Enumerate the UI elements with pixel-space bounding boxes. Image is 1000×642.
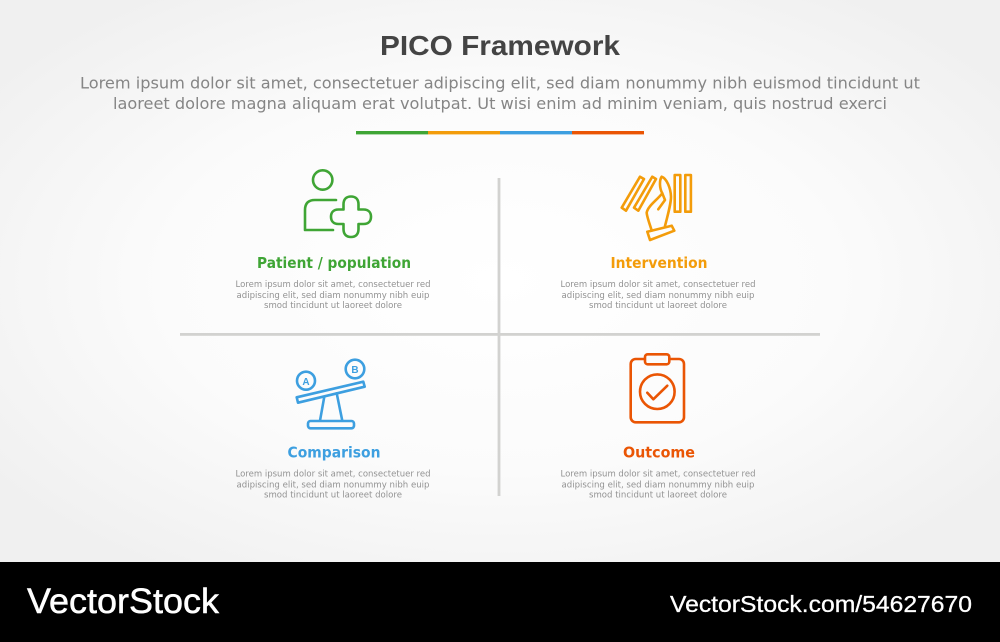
footer band [0,562,1000,642]
subtitle text: Lorem ipsum dolor sit amet, consectetuer adipiscing elit, sed diam nonummy nibh euismod tincidunt ut [80,74,920,92]
text block: outcome [560,470,756,500]
text block: patient [236,280,430,311]
text block: comparison: Lorem ipsum dolor sit amet, consectetuer red [236,470,430,480]
text block: intervention: Lorem ipsum dolor sit amet, consectetuer red [560,280,756,290]
icon: hand stopping dominoes [622,175,691,240]
text block: comparison: smod tincidunt ut laoreet dolore [264,490,402,500]
title: PICO Framework [380,30,620,61]
text block: patient: adipiscing elit, sed diam nonummy nibh euip [236,291,430,301]
subtitle text [80,74,920,113]
icon: seesaw comparing A and B: A [302,377,310,388]
panel: comparison [236,360,430,500]
text block: intervention: adipiscing elit, sed diam nonummy nibh euip [562,291,754,301]
watermark url text: VectorStock.com/54627670 [670,591,972,617]
text block: comparison: adipiscing elit, sed diam nonummy nibh euip [236,480,430,490]
heading: patient / population: Patient / population [257,254,411,272]
text block: outcome: adipiscing elit, sed diam nonummy nibh euip [562,480,754,490]
text block: patient: Lorem ipsum dolor sit amet, consectetuer red [236,280,430,290]
text block: outcome: smod tincidunt ut laoreet dolore [589,490,727,500]
heading: outcome: Outcome [623,444,695,462]
text block: patient: smod tincidunt ut laoreet dolore [264,301,402,311]
text block: comparison [236,470,430,500]
icon: patient with plus [305,170,371,237]
watermark logo text: VectorStock [27,582,220,621]
heading: comparison: Comparison [288,444,380,462]
panel: patient / population [236,170,430,311]
icon: seesaw comparing A and B: B [351,365,359,376]
colour divider bar [356,131,644,134]
icon: clipboard with check [631,354,684,422]
panel: intervention [560,175,756,311]
text block: intervention: smod tincidunt ut laoreet dolore [589,301,727,311]
icon: seesaw comparing A and B [297,360,365,428]
text block: outcome: Lorem ipsum dolor sit amet, consectetuer red [560,470,756,480]
text block: intervention [560,280,756,311]
quadrant cross lines [180,178,820,496]
heading: intervention: Intervention [610,254,708,272]
subtitle text: laoreet dolore magna aliquam erat volutpat. Ut wisi enim ad minim veniam, quis nostrud exerci [113,94,887,113]
panel: outcome [560,354,756,500]
